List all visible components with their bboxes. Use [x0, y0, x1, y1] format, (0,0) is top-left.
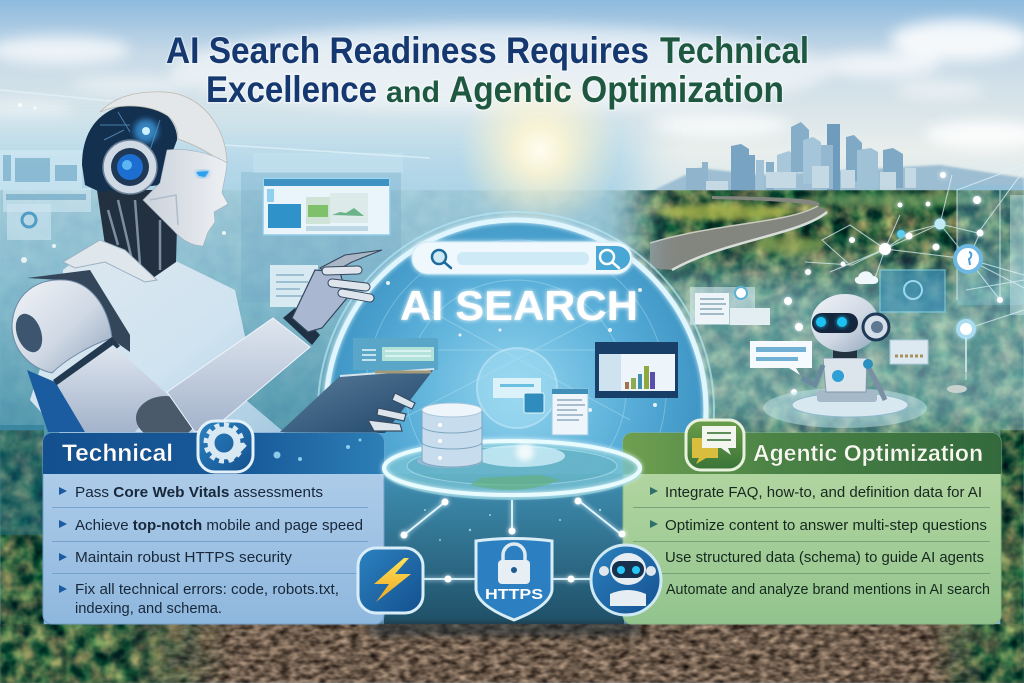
tablet clipboard [280, 369, 434, 433]
left forest teal tint [0, 425, 44, 535]
background: sky [0, 0, 1024, 215]
robot chest strap [27, 270, 130, 352]
left forest [0, 430, 44, 626]
heading: AI SEARCH: AI SEARCH [400, 282, 638, 329]
agentic header bar [623, 433, 1001, 474]
robot neck cables [97, 190, 178, 280]
database stack [417, 403, 483, 468]
robot collar [63, 240, 157, 282]
background: clouds [0, 20, 1024, 149]
search bar [412, 242, 632, 274]
icon: https shield [476, 538, 552, 620]
small assistant robot [763, 294, 927, 428]
bottom centre tech ground [384, 474, 624, 626]
network graph right [805, 165, 1024, 393]
icon: gear [198, 421, 253, 472]
floating cards near small robot [690, 287, 928, 395]
title [166, 30, 809, 110]
robot lower blue suit [27, 370, 85, 432]
small robot speech bubble [750, 341, 812, 375]
robot left shoulder [12, 280, 112, 373]
robot upper arm [57, 345, 168, 432]
background: forest landscape [0, 190, 1024, 470]
agentic heading: Agentic Optimization [753, 440, 983, 466]
title: Technical [660, 30, 809, 71]
title: and [386, 76, 440, 109]
title: Agentic Optimization [449, 69, 784, 110]
agentic item 2: Optimize content to answer multi-step questions [665, 517, 987, 534]
document card in dome [552, 389, 588, 435]
robot face [143, 150, 228, 246]
robot pointing finger [320, 250, 382, 274]
row dividers [52, 508, 368, 574]
https label: HTTPS [485, 587, 543, 603]
lower right vegetation [930, 624, 1024, 683]
background: sun [460, 70, 620, 230]
robot elbow [136, 396, 196, 440]
robot hand [292, 270, 370, 332]
hologram browser dashboard [263, 178, 390, 235]
technical heading: Technical [62, 440, 173, 467]
icon: chat bubbles [686, 420, 744, 470]
document card upper left of dome [353, 338, 438, 370]
ground shadow under panels [370, 622, 640, 636]
background: curving highway [650, 196, 827, 270]
panel: agentic optimization [623, 433, 1001, 624]
large humanoid robot [11, 92, 382, 440]
technical item 4 line 2: indexing, and schema. [75, 600, 222, 617]
robot arm joint [53, 337, 120, 392]
row dividers [633, 508, 990, 574]
robot forearm [167, 318, 310, 432]
robot brain circuitry [82, 103, 177, 192]
robot wrist [283, 308, 320, 345]
technical item 1: Pass Core Web Vitals assessments [75, 484, 323, 501]
ground path [0, 624, 1024, 683]
agentic item 4: Automate and analyze brand mentions in AI search [666, 581, 990, 598]
technical item 3: Maintain robust HTTPS security [75, 549, 292, 566]
hologram sphere [477, 348, 557, 428]
panel: technical [43, 433, 384, 624]
robot ear lens [103, 140, 157, 194]
robot eye [196, 171, 209, 177]
background: right blue haze [640, 270, 1024, 440]
lower left vegetation [0, 624, 230, 683]
icon: robot badge [591, 545, 661, 615]
background: city skyline [650, 122, 1024, 200]
bullet markers [59, 487, 67, 593]
robot helmet [100, 92, 227, 163]
agentic item 3: Use structured data (schema) to guide AI agents [665, 549, 984, 566]
right forest [1000, 430, 1024, 626]
holographic platform [382, 440, 642, 500]
technical item 4 line 1: Fix all technical errors: code, robots.txt, [75, 581, 339, 598]
icon: lightning speed [358, 548, 423, 613]
floating document left [270, 265, 318, 307]
agentic item 1: Integrate FAQ, how-to, and definition data for AI [665, 484, 982, 501]
AI search dome [318, 212, 714, 608]
holographic dashboards left [0, 90, 430, 302]
technical item 2: Achieve top-notch mobile and page speed [75, 517, 363, 534]
title: Excellence [206, 69, 377, 110]
background: yellow-green trees [655, 193, 990, 254]
bullet markers [650, 487, 658, 528]
robot back torso [30, 240, 285, 433]
robot hand under tablet [368, 393, 415, 431]
technical header bar [43, 433, 384, 474]
bar chart monitor [595, 342, 678, 398]
technical sparkles [274, 438, 362, 461]
connector lines [400, 498, 626, 582]
icon: magnifier left [432, 250, 451, 268]
icon: magnifier right [600, 250, 619, 268]
title: AI Search Readiness Requires [166, 30, 649, 71]
background: left holographic haze [0, 125, 640, 485]
